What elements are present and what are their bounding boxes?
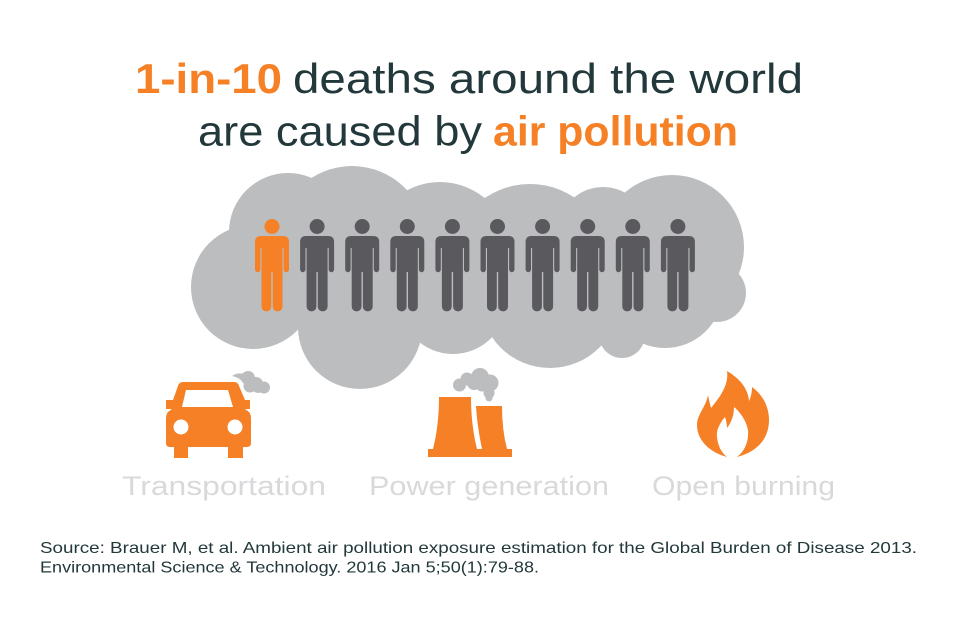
icon: car with exhaust xyxy=(166,371,270,458)
title xyxy=(135,55,803,154)
row of ten people xyxy=(255,219,695,311)
smog cloud xyxy=(191,166,746,389)
title: air pollution xyxy=(493,108,738,154)
icon: power plant with smoke xyxy=(428,368,512,457)
source citation: Environmental Science & Technology. 2016 Jan 5;50(1):79-88. xyxy=(40,560,539,576)
label: Transportation: Transportation xyxy=(122,471,326,501)
icon: flame xyxy=(697,371,769,457)
label: Open burning: Open burning xyxy=(652,471,835,501)
title: 1-in-10 xyxy=(135,55,282,102)
label: Power generation: Power generation xyxy=(369,471,609,501)
source citation: Source: Brauer M, et al. Ambient air pollution exposure estimation for the Global Burden of Disease 2013. xyxy=(40,540,917,557)
source citation xyxy=(40,540,917,576)
title: are caused by xyxy=(198,108,482,154)
person highlighted orange xyxy=(255,219,289,311)
people in grey xyxy=(300,219,695,311)
title: deaths around the world xyxy=(293,55,803,102)
